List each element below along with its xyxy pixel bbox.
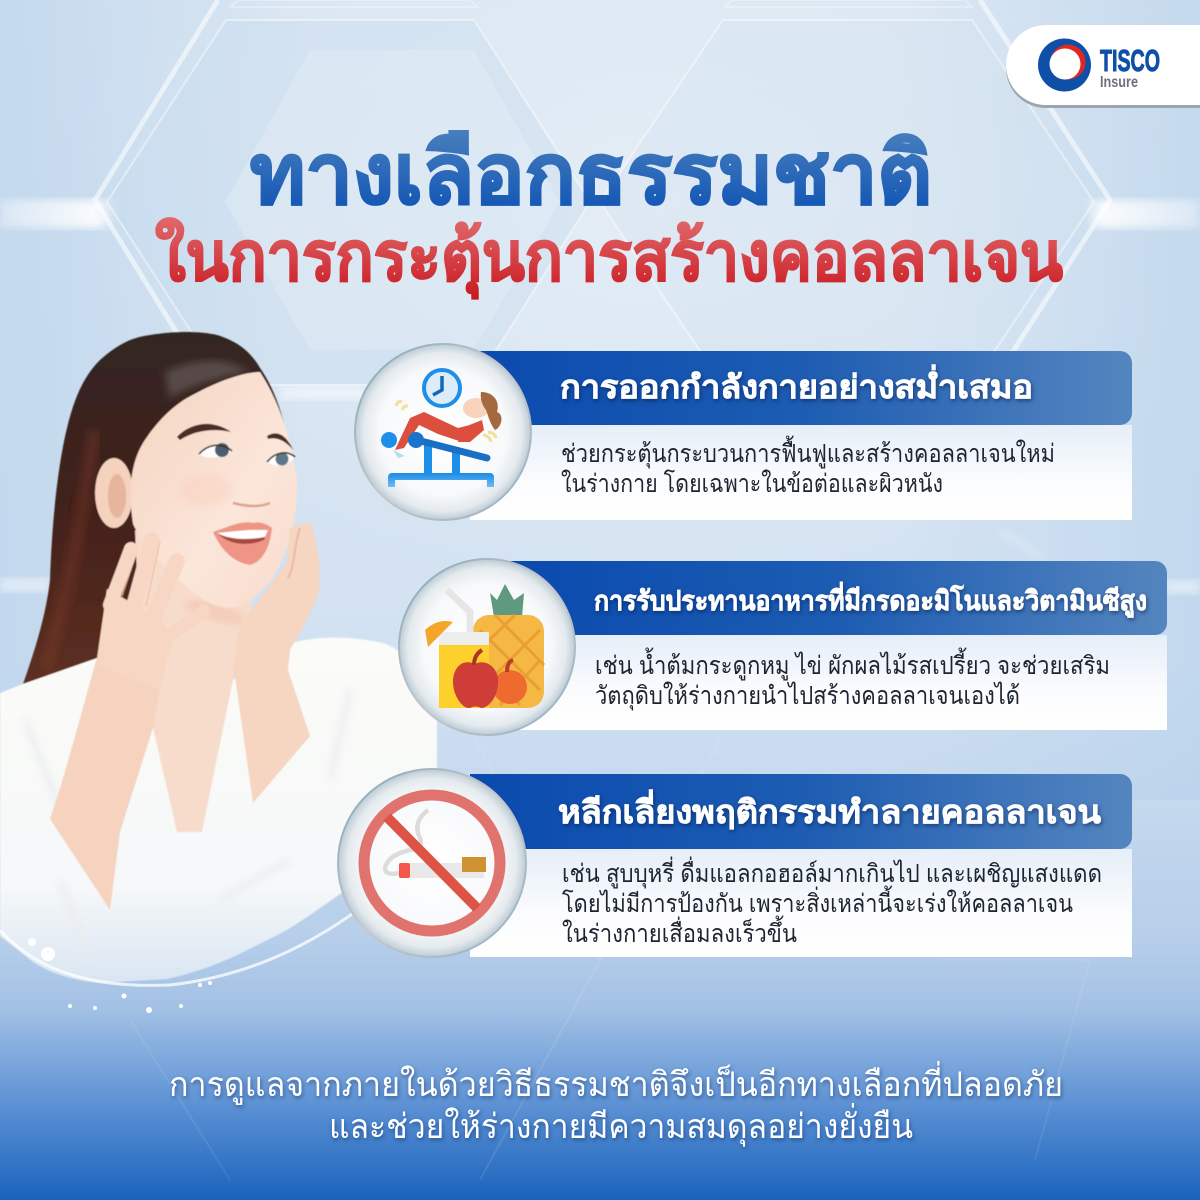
title: ทางเลือกธรรมชาติ [250,127,932,221]
logo: TISCO Insure: Insure [1100,74,1138,91]
text 2: วัตถุดิบให้ร่างกายนำไปสร้างคอลลาเจนเองได้ [595,681,1020,711]
closing message [169,1061,1063,1147]
icon: fruit and juice bubble [399,559,575,735]
heading 1: การออกกำลังกายอย่างสม่ำเสมอ [560,364,1033,405]
icon: exercise bubble [355,344,531,520]
photo: smiling woman in white robe [0,332,437,983]
text 1: ในร่างกาย โดยเฉพาะในข้อต่อและผิวหนัง [561,469,943,498]
heading 3: หลีกเลี่ยงพฤติกรรมทำลายคอลลาเจน [558,789,1101,830]
text 3: ในร่างกายเสื่อมลงเร็วขึ้น [562,915,797,948]
text 1 [561,435,1055,498]
closing message: และช่วยให้ร่างกายมีความสมดุลอย่างยั่งยืน [329,1103,913,1147]
header bar 1 [470,351,1132,425]
text 3 [562,856,1102,948]
icon: no smoking bubble [338,769,526,957]
panel body 3 [470,849,1132,957]
header bar 3 [470,774,1132,849]
text 2: เช่น น้ำต้มกระดูกหมู ไข่ ผักผลไม้รสเปรี้ยว จะช่วยเสริม [595,647,1110,681]
text 3: โดยไม่มีการป้องกัน เพราะสิ่งเหล่านี้จะเร่งให้คอลลาเจน [562,885,1073,918]
logo: TISCO Insure [1006,25,1200,108]
title [155,127,1063,299]
header bar 2 [510,561,1167,635]
panel body 2 [510,635,1167,730]
text 2 [595,647,1110,711]
title: ในการกระตุ้นการสร้างคอลลาเจน [155,217,1063,299]
panel: avoid collagen-damaging behaviour [470,774,1132,957]
panel body 1 [470,425,1132,520]
panel: regular exercise [470,351,1132,520]
text 3: เช่น สูบบุหรี่ ดื่มแอลกอฮอล์มากเกินไป และเผชิญแสงแดด [562,856,1102,889]
heading 2: การรับประทานอาหารที่มีกรดอะมิโนและวิตามินซีสูง [594,581,1147,618]
text 1: ช่วยกระตุ้นกระบวนการฟื้นฟูและสร้างคอลลาเจนใหม่ [561,435,1055,469]
glass bubble curve with sparkles [0,885,390,1013]
logo: TISCO Insure: TISCO [1100,43,1160,78]
closing message: การดูแลจากภายในด้วยวิธีธรรมชาติจึงเป็นอีกทางเลือกที่ปลอดภัย [169,1061,1063,1105]
panel: amino acids and vitamin C [510,561,1167,730]
